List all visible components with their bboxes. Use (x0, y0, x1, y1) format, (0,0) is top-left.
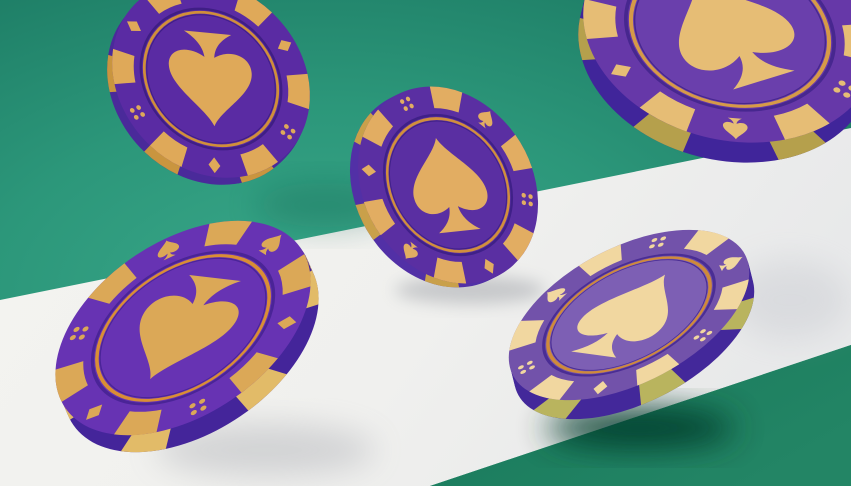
background: lower right green corner (430, 345, 851, 486)
chip: top left (72, 0, 345, 225)
shadows under chips (155, 183, 850, 476)
chip: bottom left (16, 215, 358, 458)
chip: top right (527, 0, 851, 207)
chip: bottom right (459, 210, 804, 439)
background: white diagonal band (0, 128, 851, 486)
chip: center (348, 71, 540, 303)
